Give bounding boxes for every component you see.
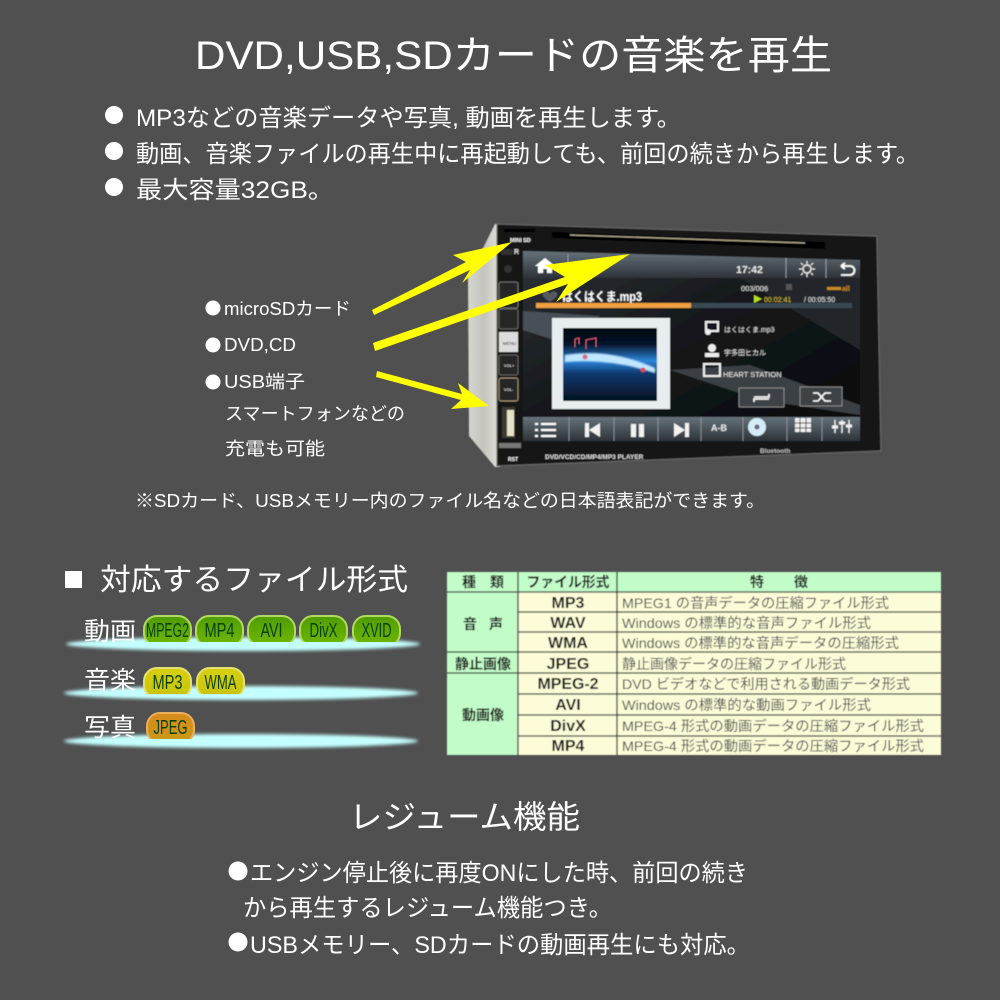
album art <box>552 318 670 409</box>
side buttons: VOL- <box>504 387 514 392</box>
source label: SD <box>573 260 586 270</box>
side buttons: R <box>514 249 519 256</box>
feature bullet list <box>105 105 919 204</box>
faceplate model text: DVD/VCD/CD/MP4/MP3 PLAYER <box>545 454 644 461</box>
header row text: ファイル形式 <box>526 572 610 592</box>
format row: video: XVID <box>362 620 392 642</box>
format row: video <box>84 616 400 646</box>
format names: WMA <box>548 635 588 652</box>
format names: MPEG-2 <box>538 676 599 693</box>
back arrow icon <box>841 263 854 275</box>
arrow: DVD slot <box>373 254 630 351</box>
format descriptions: Windows の標準的な動画ファイル形式 <box>622 697 871 713</box>
resume description: エンジン停止後に再度ONにした時、前回の続き <box>250 860 748 887</box>
feature bullet list: MP3などの音楽データや写真, 動画を再生します。 <box>136 105 681 132</box>
format row: video: 動画 <box>84 618 136 646</box>
resume description: USBメモリー、SDカードの動画再生にも対応。 <box>250 932 750 959</box>
side buttons: MENU <box>503 341 516 346</box>
disc slot <box>552 232 825 249</box>
bottom control bar <box>523 417 860 441</box>
port labels: microSDカード <box>224 299 351 319</box>
side buttons <box>499 229 535 463</box>
format row: video: AVI <box>260 620 282 642</box>
repeat and shuffle buttons <box>739 387 842 407</box>
bluetooth text: Bluetooth <box>760 448 790 455</box>
track info rows: HEART STATION <box>723 370 782 379</box>
format row: video: MP4 <box>204 620 234 642</box>
format names: MP4 <box>552 738 585 755</box>
screen wedge highlights <box>523 278 860 415</box>
progress bar <box>536 303 852 308</box>
format row: video: DivX <box>310 620 338 642</box>
top bar dividers <box>568 254 826 278</box>
format descriptions: MPEG-4 形式の動画データの圧縮ファイル形式 <box>622 718 924 734</box>
port labels: スマートフォンなどの <box>225 404 405 424</box>
format descriptions: 静止画像データの圧縮ファイル形式 <box>622 656 846 672</box>
arrow: USB port <box>376 371 489 409</box>
clock: 17:42 <box>736 264 763 276</box>
format names: WAV <box>550 615 586 632</box>
table header and category cells <box>447 572 941 755</box>
feature bullet list: 最大容量32GB。 <box>136 177 334 204</box>
format row: music <box>85 667 245 694</box>
format row: music: MP3 <box>152 672 182 694</box>
header row text <box>462 572 808 592</box>
format descriptions: DVD ビデオなどで利用される動画データ形式 <box>622 676 910 692</box>
track status: 00:02:41 <box>764 297 791 304</box>
port labels <box>206 299 405 459</box>
port labels: USB端子 <box>224 372 305 392</box>
track info rows: 宇多田ヒカル <box>724 348 766 357</box>
format descriptions: Windows の標準的な音声データの圧縮形式 <box>622 635 899 651</box>
device silver side chassis <box>468 224 500 467</box>
category labels <box>455 614 511 725</box>
car stereo device photo <box>468 224 881 467</box>
resume description <box>228 860 750 959</box>
format names: MP3 <box>552 595 585 612</box>
category labels: 静止画像 <box>455 654 511 674</box>
format descriptions: Windows の標準的な音声ファイル形式 <box>622 615 871 631</box>
side buttons: MINI SD <box>510 238 531 244</box>
format row: video: MPEG2 <box>146 620 189 642</box>
track status: 003/006 <box>741 284 768 293</box>
format row: photo <box>84 713 194 743</box>
section heading: file formats: 対応するファイル形式 <box>100 564 408 597</box>
format names: AVI <box>555 697 581 714</box>
format descriptions: MPEG-4 形式の動画データの圧縮ファイル形式 <box>622 738 924 754</box>
home icon <box>535 258 555 273</box>
category labels: 動画像 <box>462 705 504 725</box>
format names: DivX <box>550 718 586 735</box>
device black faceplate <box>497 224 881 466</box>
file format table <box>447 572 941 755</box>
format row: photo: 写真 <box>84 714 136 742</box>
format names <box>538 595 599 755</box>
port labels: 充電も可能 <box>225 439 325 459</box>
table background <box>447 572 941 755</box>
category labels: 音 声 <box>463 614 503 634</box>
glow bars <box>64 637 420 748</box>
format names: JPEG <box>547 656 589 673</box>
heart icon <box>543 291 557 302</box>
touch screen <box>523 251 860 441</box>
title: DVD,USB,SDカードの音楽を再生 <box>195 34 832 78</box>
side buttons: RST <box>508 457 518 463</box>
port labels: DVD,CD <box>224 335 296 355</box>
feature bullet list: 動画、音楽ファイルの再生中に再起動しても、前回の続きから再生します。 <box>136 141 919 168</box>
note: ※SDカード、USBメモリー内のファイル名などの日本語表記ができます。 <box>135 491 765 511</box>
track status: / 00:05:50 <box>804 297 835 304</box>
format row: music: WMA <box>204 672 237 694</box>
track info rows <box>704 322 782 379</box>
format descriptions <box>622 595 924 754</box>
arrow: microSD <box>372 242 512 315</box>
header row text: 種 類 <box>462 572 504 592</box>
format descriptions: MPEG1 の音声データの圧縮ファイル形式 <box>622 595 889 611</box>
track status: all <box>842 286 850 293</box>
track info rows: はくはくま.mp3 <box>724 326 775 334</box>
header row text: 特 徴 <box>750 572 808 592</box>
format row: music: 音楽 <box>84 667 136 695</box>
track status <box>741 284 850 304</box>
bottom control bar: A-B <box>711 423 727 433</box>
section heading: resume function: レジューム機能 <box>349 799 580 835</box>
side buttons: VOL+ <box>504 363 515 368</box>
resume description: から再生するレジューム機能つき。 <box>243 895 612 922</box>
format row: photo: JPEG <box>154 717 188 739</box>
track name: はくはくま.mp3 <box>562 290 642 304</box>
screen top bar <box>523 251 860 278</box>
settings sun icon <box>799 261 815 277</box>
